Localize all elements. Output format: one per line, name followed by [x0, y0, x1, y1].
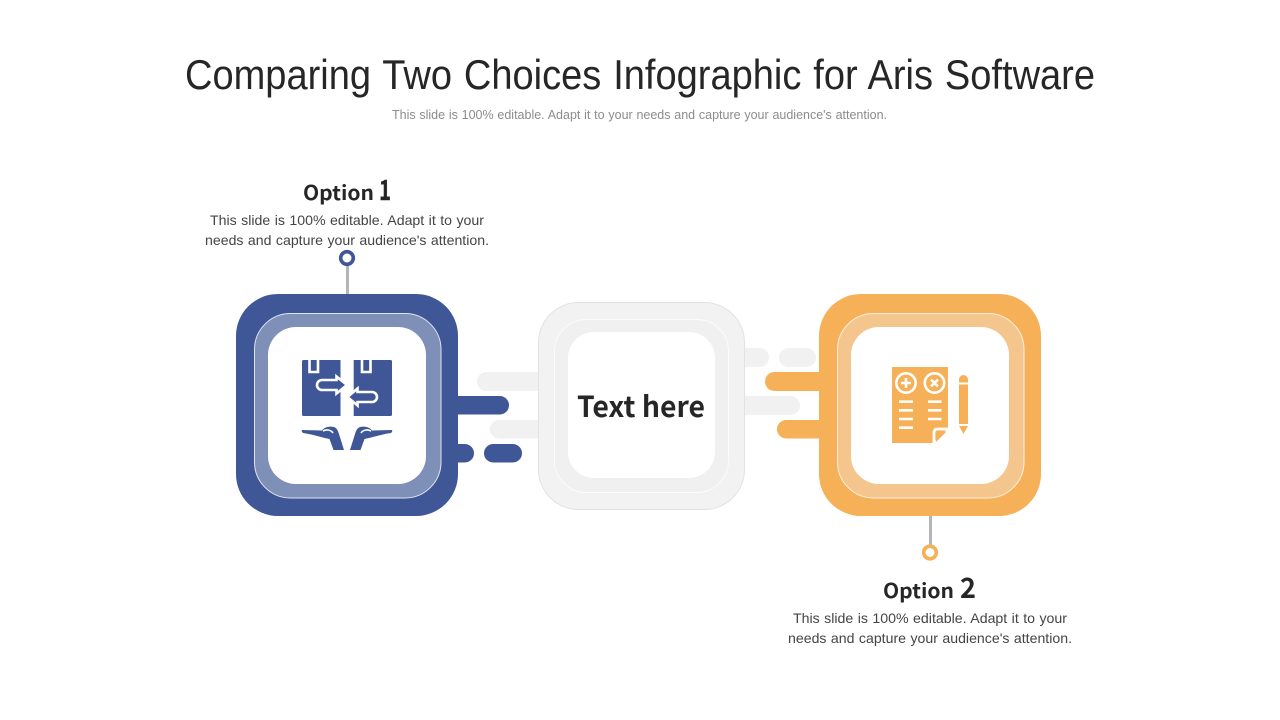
decorative light bars left of centre panel	[477, 372, 560, 438]
option 1 heading	[303, 169, 391, 209]
panel: option 2 text	[788, 567, 1072, 646]
panel: orange option 2 tile	[765, 294, 1041, 516]
panel: blue option 1 tile	[236, 294, 522, 516]
option 1 description: This slide is 100% editable. Adapt it to your	[210, 212, 484, 228]
option 2 description: needs and capture your audience's attention.	[788, 630, 1072, 646]
panel: centre text here	[538, 302, 744, 510]
subtitle: This slide is 100% editable. Adapt it to your needs and capture your audience's attention.	[392, 108, 887, 122]
connector: option 2 pin	[924, 516, 936, 559]
connector: option 1 pin	[341, 252, 353, 295]
title: Comparing Two Choices Infographic for Aris Software	[185, 51, 1095, 98]
blue bars	[440, 396, 522, 462]
option 2 heading: Option	[883, 575, 954, 604]
icon: pros and cons list with pencil	[892, 367, 968, 444]
option 1 heading: Option	[303, 177, 374, 206]
option 2 heading	[883, 567, 976, 607]
option 2 heading: 2	[960, 567, 976, 607]
option 1 description: needs and capture your audience's attention.	[205, 232, 489, 248]
option 2 description	[788, 610, 1072, 646]
centre label: Text here	[577, 384, 705, 426]
option 1 heading: 1	[379, 169, 391, 209]
option 1 description	[205, 212, 489, 248]
option 2 description: This slide is 100% editable. Adapt it to your	[793, 610, 1067, 626]
orange bars	[765, 372, 837, 438]
panel: option 1 text	[205, 169, 489, 248]
icon: boxes exchanged between hands	[302, 360, 392, 450]
decorative light bars right of centre panel	[725, 348, 816, 415]
